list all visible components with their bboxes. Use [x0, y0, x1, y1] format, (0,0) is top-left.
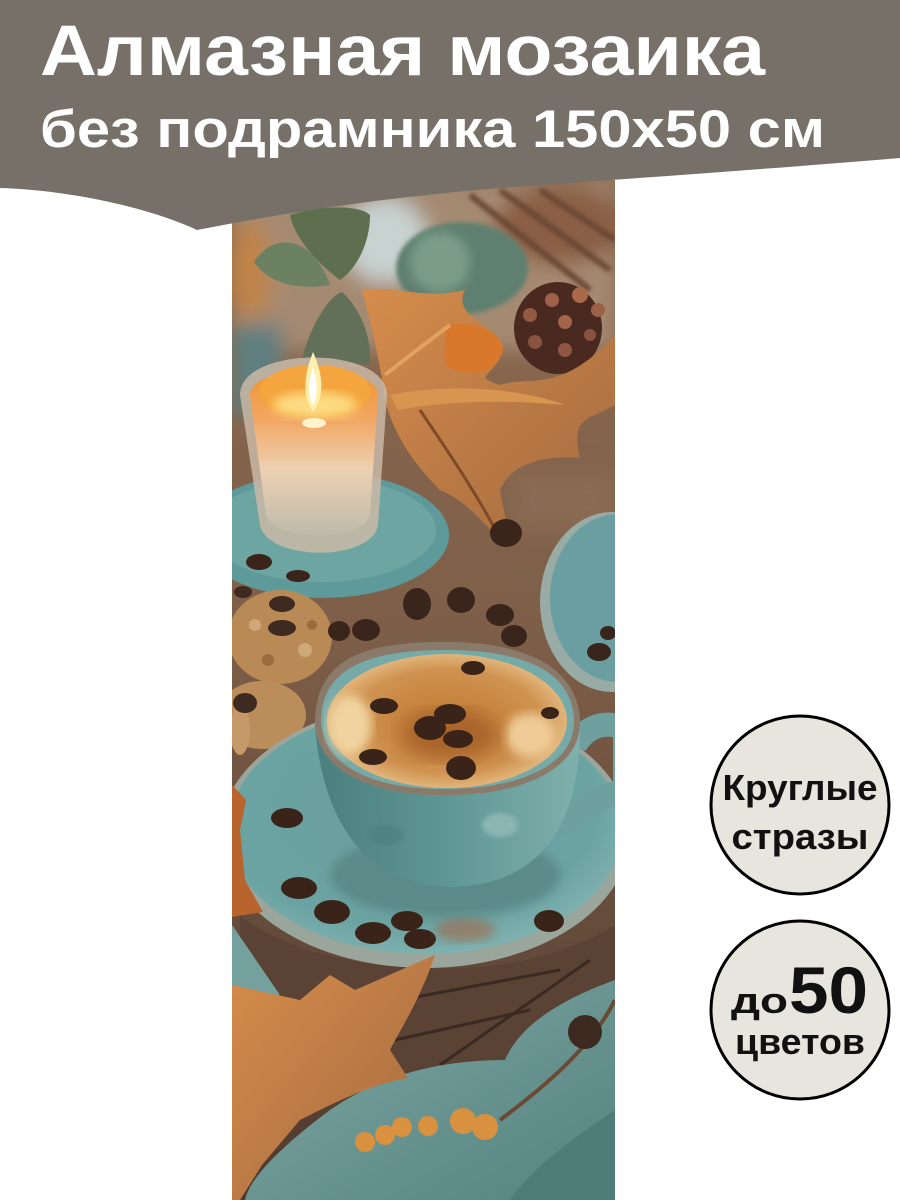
- cup: [315, 642, 580, 887]
- badge: round rhinestones: Круглые: [722, 767, 878, 808]
- main photo: coffee cup and candle: [232, 180, 615, 1200]
- wood table background: [232, 180, 615, 1200]
- title line 2: без подрамника 150х50 см: [40, 100, 825, 159]
- pine cone: [514, 282, 605, 374]
- orange berries: [355, 1108, 498, 1152]
- cinnamon specks: [435, 918, 495, 942]
- title line 1: Алмазная мозаика: [40, 12, 766, 91]
- badge: up to 50 colours: 50: [789, 953, 868, 1027]
- badge: round rhinestones: стразы: [732, 816, 868, 857]
- badge: up to 50 colours: [711, 921, 889, 1099]
- header banner: [0, 0, 900, 230]
- large maple leaf bottom: [232, 955, 435, 1200]
- blurred top background: [228, 180, 625, 530]
- badge: round rhinestones: [711, 716, 889, 894]
- candle saucer beans: [246, 554, 272, 570]
- badge: up to 50 colours: до: [731, 980, 788, 1021]
- candle glass: [240, 352, 387, 553]
- right top saucer: [540, 512, 615, 692]
- teal cloth bottom right: [245, 980, 615, 1200]
- bottom wood: [240, 915, 615, 1075]
- small leaf at left: [232, 785, 263, 917]
- big saucer: [234, 722, 615, 968]
- beans on saucer: [271, 808, 564, 949]
- twigs: [470, 190, 615, 290]
- badge: up to 50 colours: цветов: [735, 1021, 865, 1062]
- table beans: [328, 519, 616, 661]
- cup handle: [579, 712, 615, 806]
- cookies: [232, 586, 332, 755]
- beans on foam: [359, 661, 559, 780]
- small cloth left: [232, 925, 280, 1000]
- green leaves: [254, 208, 528, 365]
- title: [40, 12, 825, 159]
- orange maple leaf top: [362, 289, 615, 545]
- candle saucer: [232, 478, 449, 598]
